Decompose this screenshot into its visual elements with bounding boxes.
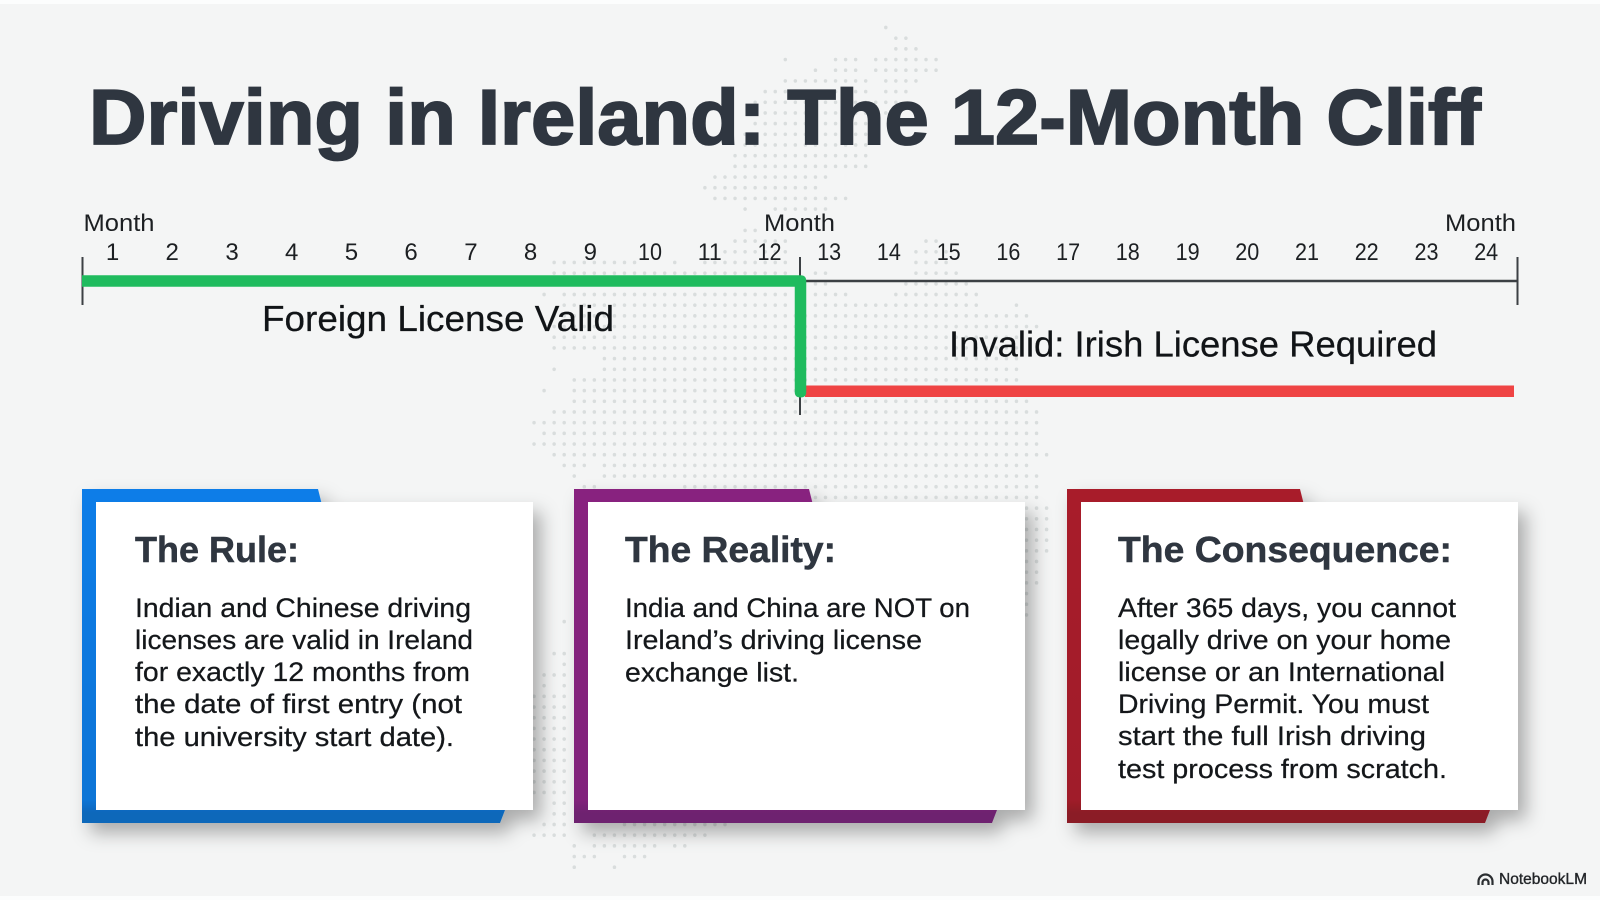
body text: After 365 days, you cannot (1118, 593, 1457, 623)
card shape (574, 489, 1025, 823)
body text (625, 593, 970, 688)
dotted map of Ireland (534, 28, 1048, 867)
heading: The Reality: (625, 529, 836, 570)
label: foreign license valid: Foreign License Valid (262, 298, 614, 339)
icon: notebook arcs (1478, 874, 1492, 885)
body text: licenses are valid in Ireland (135, 625, 473, 655)
heading: The Consequence: (1118, 529, 1452, 570)
month labels: 18 (1116, 239, 1140, 266)
month labels: 8 (524, 239, 537, 266)
month labels: 14 (877, 239, 901, 266)
card shape (82, 489, 533, 823)
body text: license or an International (1118, 657, 1445, 687)
body text: India and China are NOT on (625, 593, 970, 623)
month labels: Month (84, 210, 154, 237)
body text: for exactly 12 months from (135, 657, 470, 687)
timeline (82, 210, 1518, 415)
body text: the university start date). (135, 722, 454, 752)
body text (1118, 593, 1457, 784)
month labels: 20 (1235, 239, 1259, 266)
month labels: 24 (1474, 239, 1498, 266)
month labels: 12 (758, 239, 782, 266)
month labels: 2 (166, 239, 179, 266)
month labels: 21 (1295, 239, 1319, 266)
month labels: 15 (937, 239, 961, 266)
month labels: Month (1445, 210, 1516, 237)
month labels: 10 (638, 239, 662, 266)
month labels: 16 (996, 239, 1020, 266)
month labels: 6 (404, 239, 418, 266)
month labels: 4 (285, 239, 298, 266)
body text (135, 593, 473, 752)
month labels: 22 (1355, 239, 1379, 266)
month labels: 5 (345, 239, 358, 266)
month labels: 17 (1056, 239, 1080, 266)
month labels: 9 (584, 239, 597, 266)
panel: the reality (574, 489, 1025, 823)
panel: the consequence (1067, 489, 1518, 823)
title: Driving in Ireland: The 12-Month Cliff (89, 73, 1482, 161)
month labels: 23 (1414, 239, 1438, 266)
wordmark: NotebookLM (1499, 871, 1587, 888)
month labels: 1 (106, 239, 119, 266)
body text: Driving Permit. You must (1118, 689, 1430, 719)
month labels: Month (764, 210, 835, 237)
body text: legally drive on your home (1118, 625, 1451, 655)
month labels: 19 (1176, 239, 1200, 266)
month labels (84, 210, 1516, 266)
body text: start the full Irish driving (1118, 721, 1426, 751)
green valid bar with drop (82, 275, 806, 398)
body text: the date of first entry (not (135, 689, 463, 719)
NotebookLM watermark (1478, 871, 1587, 888)
panel: the rule (82, 489, 533, 823)
card shape (1067, 489, 1518, 823)
label: invalid: Invalid: Irish License Required (949, 324, 1437, 364)
month labels: 3 (225, 239, 239, 266)
axis line and ticks (82, 257, 1518, 415)
body text: exchange list. (625, 658, 799, 688)
month labels: 11 (698, 239, 722, 266)
month labels: 7 (464, 239, 478, 266)
heading: The Rule: (135, 529, 299, 570)
body text: Indian and Chinese driving (135, 593, 471, 623)
body text: Ireland’s driving license (625, 625, 922, 655)
body text: test process from scratch. (1118, 754, 1447, 784)
red invalid bar (805, 386, 1514, 397)
month labels: 13 (817, 239, 841, 266)
